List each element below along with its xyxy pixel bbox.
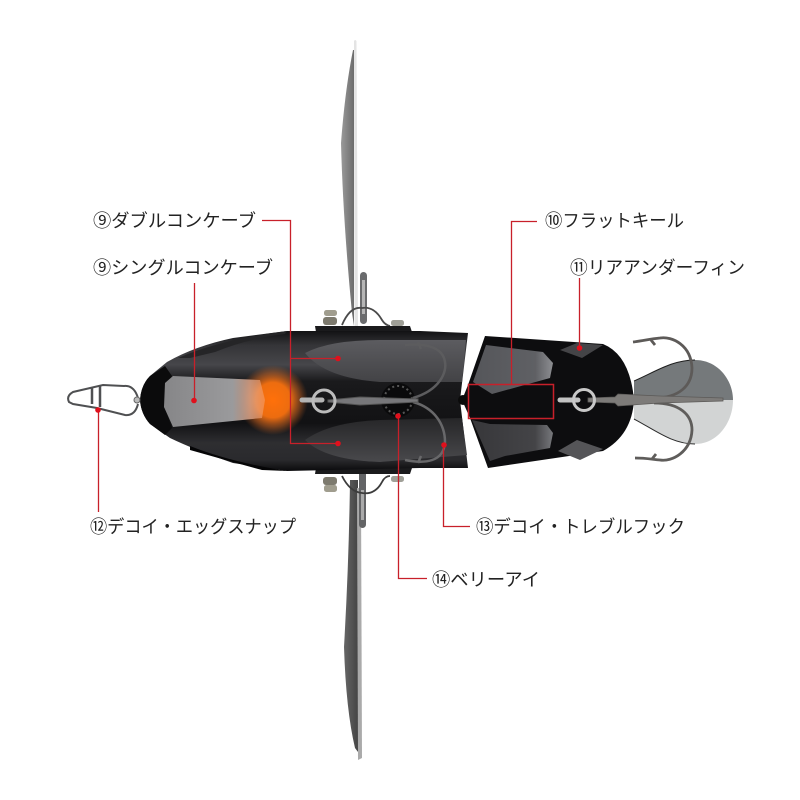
line: flat keel xyxy=(512,222,537,384)
callout lines xyxy=(98,220,580,578)
rear treble hook xyxy=(560,338,723,460)
label: single concave: ⑨シングルコンケーブ xyxy=(93,257,273,278)
rear panel lower xyxy=(472,420,553,461)
upper blade xyxy=(341,40,358,328)
rear panel upper xyxy=(473,345,553,394)
line: single concave xyxy=(194,283,196,400)
front body xyxy=(140,331,468,471)
label: decoy treble hook: ⑬デコイ・トレブルフック xyxy=(476,516,685,537)
line: egg snap xyxy=(98,410,100,512)
rear body shell xyxy=(462,336,634,468)
lower hardware: screws and wire xyxy=(315,468,412,528)
flat keel highlight box xyxy=(468,384,554,418)
label: decoy egg snap: ⑫デコイ・エッグスナップ xyxy=(90,517,296,537)
front treble hook xyxy=(302,342,445,463)
rear fin lower xyxy=(558,440,603,460)
label: flat keel: ⑩フラットキール xyxy=(545,211,684,231)
line: belly eye xyxy=(398,416,427,578)
rear body xyxy=(458,336,634,468)
label: double concave: ⑨ダブルコンケーブ xyxy=(93,210,256,231)
line: rear under fin xyxy=(578,278,580,348)
tail spinner xyxy=(634,360,733,444)
junction xyxy=(458,395,468,405)
upper hardware: screws and wire xyxy=(315,272,412,332)
line: treble hook xyxy=(444,445,470,526)
decoy egg snap xyxy=(68,385,140,415)
label: belly eye: ⑭ベリーアイ xyxy=(432,570,540,590)
line: double concave xyxy=(262,220,338,444)
label: rear under fin: ⑪リアアンダーフィン xyxy=(570,258,745,278)
front body shell xyxy=(140,331,468,471)
orange belly glow xyxy=(238,365,308,435)
side ridge upper xyxy=(178,331,287,358)
rear fin upper xyxy=(560,343,603,358)
single concave recess xyxy=(164,376,265,427)
callout dots xyxy=(95,345,582,448)
lower blade xyxy=(344,480,362,760)
double concave lower xyxy=(305,418,467,462)
dark nose xyxy=(140,366,172,435)
double concave upper xyxy=(305,340,466,382)
side ridge lower xyxy=(190,446,287,471)
belly eye xyxy=(381,383,415,417)
